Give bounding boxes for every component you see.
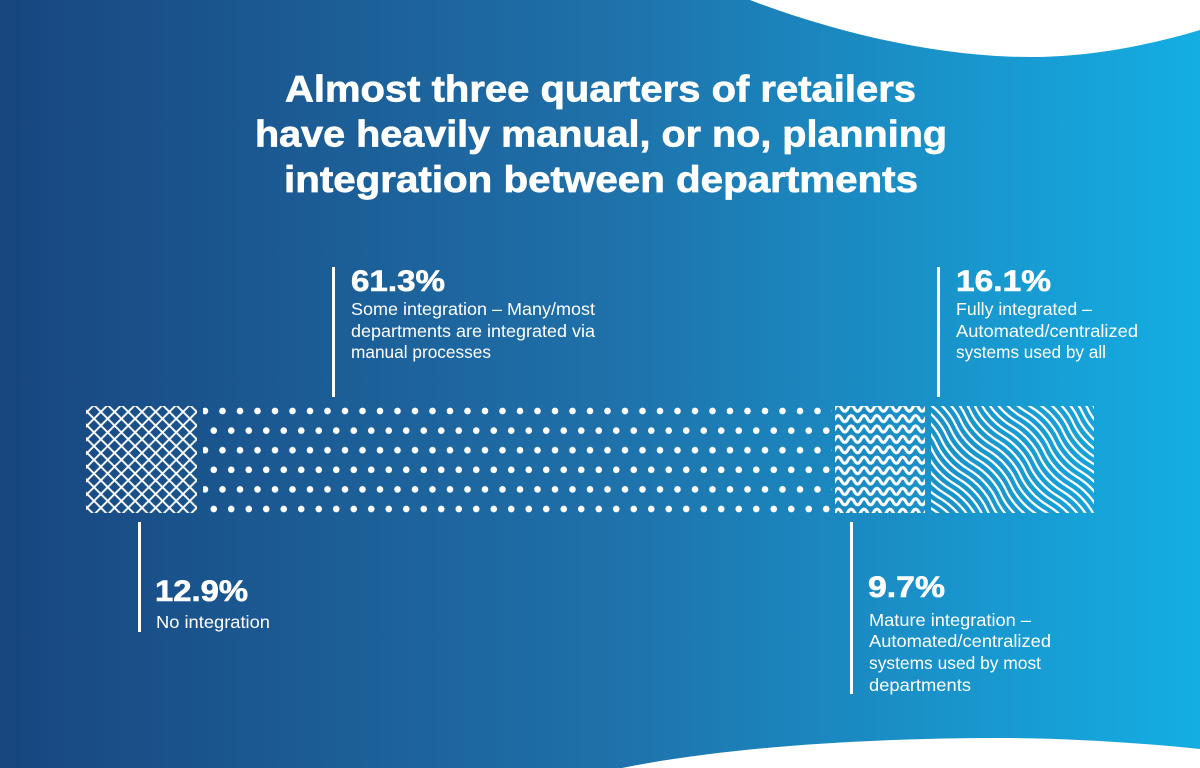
callout: 61.3% some integration: departments are integrated via: [351, 321, 595, 341]
callout: 61.3% some integration: 61.3%: [351, 265, 445, 298]
callout: 9.7% mature integration: [850, 522, 1051, 695]
bottom white wave: [622, 738, 1200, 768]
callout: 9.7% mature integration: 9.7%: [868, 571, 945, 604]
callout: 9.7% mature integration: systems used by most: [869, 653, 1041, 673]
title: Almost three quarters of retailers: [285, 68, 916, 110]
callout: 9.7% mature integration: Automated/centralized: [869, 631, 1051, 651]
callout: 61.3% some integration: [332, 265, 595, 397]
callout: 16.1% fully integrated: Fully integrated –: [956, 299, 1092, 319]
callout: 16.1% fully integrated: 16.1%: [956, 265, 1051, 298]
callout: 12.9% no integration: No integration: [156, 612, 270, 632]
callout: 12.9% no integration: 12.9%: [155, 575, 248, 608]
segment: mature integration waves: [835, 406, 925, 513]
callout: 16.1% fully integrated: Automated/centralized: [956, 321, 1138, 341]
segment: no integration crosshatch: [86, 406, 197, 513]
callout: 9.7% mature integration: departments: [869, 675, 971, 695]
stacked bar chart: [86, 406, 1094, 513]
title: [255, 68, 947, 200]
title: integration between departments: [284, 159, 918, 200]
segment: some integration dots: [203, 406, 832, 513]
callout: 9.7% mature integration: Mature integration –: [869, 610, 1031, 630]
callout: 12.9% no integration: [138, 522, 270, 632]
callout: 61.3% some integration: Some integration – Many/most: [351, 299, 595, 319]
segment: fully integrated diagonal waves: [931, 406, 1094, 513]
top white wave: [750, 0, 1200, 57]
callout: 61.3% some integration: manual processes: [351, 342, 491, 362]
callout: 16.1% fully integrated: systems used by all: [956, 342, 1106, 362]
title: have heavily manual, or no, planning: [255, 114, 947, 154]
callout: 16.1% fully integrated: [937, 265, 1138, 397]
